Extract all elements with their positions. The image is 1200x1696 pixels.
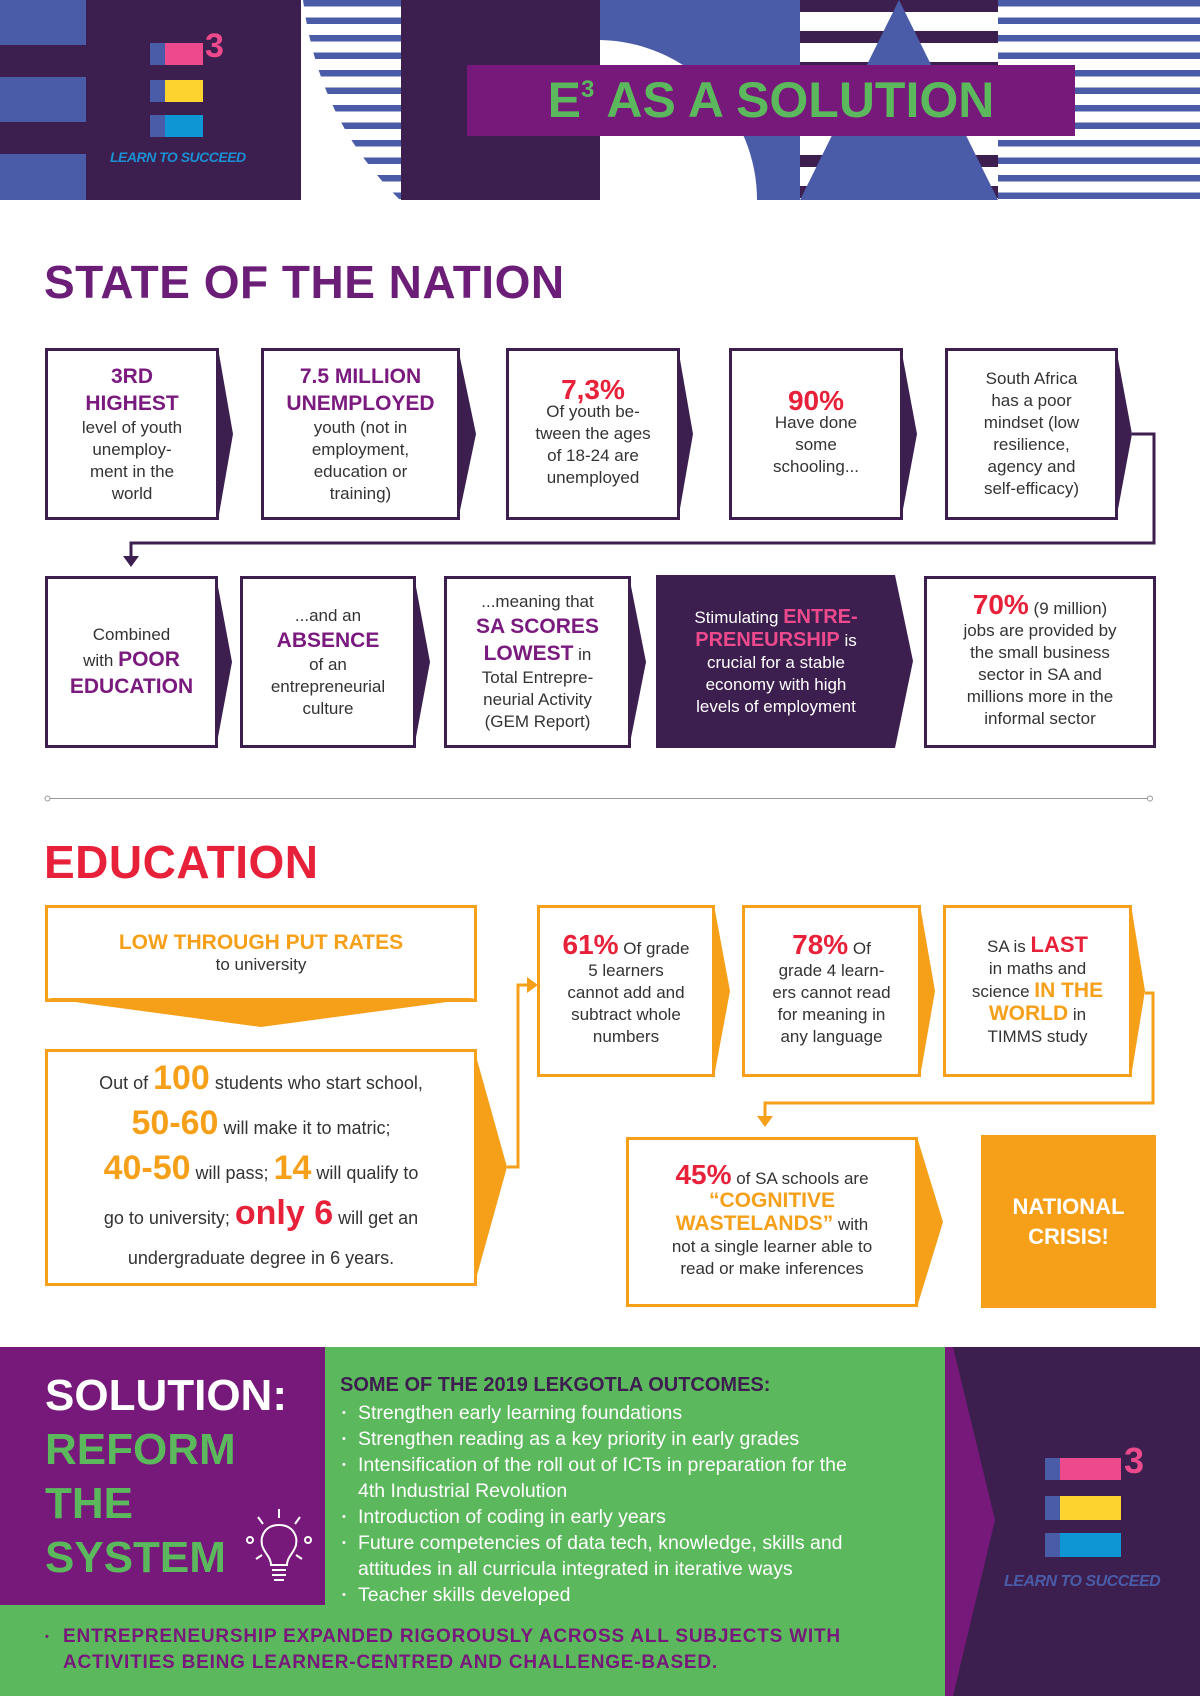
box: 70%: 70% (9 million) bbox=[973, 589, 1107, 620]
heading: education: EDUCATION bbox=[44, 836, 319, 888]
box: poor mindset: self-efficacy) bbox=[984, 479, 1079, 498]
connector arrow: row1 to row2 bbox=[123, 432, 1156, 567]
box: 61%: 5 learners bbox=[588, 961, 664, 980]
text block: lekgotla outcomes: Intensification of the roll out of ICTs in preparation for the bbox=[358, 1454, 847, 1476]
box: 70% bbox=[924, 576, 1156, 748]
box: last in world: TIMMS study bbox=[987, 1027, 1088, 1046]
box: stimulating entrepreneurship: Stimulating ENTRE- bbox=[694, 606, 858, 628]
box: 61% bbox=[537, 905, 730, 1077]
box: 78% bbox=[742, 905, 935, 1077]
box: last in world bbox=[943, 905, 1145, 1077]
panel: solution reform the system bbox=[0, 1347, 325, 1605]
text block: lekgotla outcomes: Strengthen early learning foundations bbox=[358, 1402, 682, 1424]
panel: solution reform the system: REFORM bbox=[45, 1425, 236, 1474]
box: 70%: jobs are provided by bbox=[963, 621, 1117, 640]
panel: solution section background bbox=[0, 1347, 1200, 1696]
box: out of 100: go to university; only 6 will get an bbox=[104, 1194, 418, 1232]
box: 3rd highest: unemploy- bbox=[92, 440, 172, 459]
logo: header: 3 bbox=[205, 27, 224, 65]
box: 7.5 million: 7.5 MILLION bbox=[300, 365, 421, 388]
callout: national crisis: CRISIS! bbox=[1028, 1224, 1109, 1248]
logo: header bbox=[110, 27, 246, 165]
box: out of 100: Out of 100 students who start school, bbox=[99, 1058, 423, 1096]
box: low through put rates: LOW THROUGH PUT RATES bbox=[119, 930, 403, 954]
box: 90% bbox=[729, 348, 917, 520]
box: 7.5 million: employment, bbox=[312, 440, 409, 459]
box: 7.5 million: youth (not in bbox=[314, 418, 407, 437]
text block: lekgotla outcomes: 4th Industrial Revolution bbox=[358, 1480, 567, 1502]
box: 7,3%: unemployed bbox=[547, 468, 639, 487]
box: poor mindset: agency and bbox=[988, 457, 1075, 476]
text block: entrepreneurship expanded: ACTIVITIES BEING LEARNER-CENTRED AND CHALLENGE-BASED. bbox=[63, 1652, 718, 1673]
panel: solution reform the system: SOLUTION: bbox=[45, 1371, 287, 1420]
box: poor education: with POOR bbox=[83, 648, 180, 671]
box: 90%: 90% bbox=[788, 385, 844, 416]
text block: lekgotla outcomes: SOME OF THE 2019 LEKGOTLA OUTCOMES: bbox=[340, 1374, 770, 1396]
box: 3rd highest: world bbox=[112, 484, 152, 503]
box: absence: ABSENCE bbox=[277, 628, 379, 652]
connector arrow: to 45% bbox=[757, 992, 1154, 1127]
box: 7.5 million: education or bbox=[314, 462, 407, 481]
box: 7.5 million: training) bbox=[330, 484, 391, 503]
box: out of 100: 40-50 will pass; 14 will qualify to bbox=[104, 1148, 418, 1186]
box: 90%: schooling... bbox=[773, 457, 859, 476]
box: 90%: some bbox=[795, 435, 837, 454]
box: 45% cognitive wastelands: read or make inferences bbox=[680, 1259, 864, 1278]
panel: solution reform the system: THE bbox=[45, 1479, 133, 1528]
box: stimulating entrepreneurship: economy with high bbox=[706, 674, 846, 694]
box: SA scores lowest bbox=[444, 576, 646, 748]
box: 61%: 61% Of grade bbox=[563, 929, 689, 960]
logo: footer: 3 bbox=[1124, 1440, 1144, 1481]
logo: footer: LEARN TO SUCCEED bbox=[1004, 1573, 1160, 1590]
box: poor education: Combined bbox=[93, 625, 170, 644]
box: 45% cognitive wastelands: 45% of SA schools are bbox=[675, 1159, 869, 1190]
box: poor education bbox=[45, 576, 232, 748]
box: absence: of an bbox=[309, 654, 347, 674]
box: 70%: informal sector bbox=[984, 709, 1096, 728]
box: 61%: subtract whole bbox=[571, 1005, 681, 1024]
panel: solution reform the system: SYSTEM bbox=[45, 1533, 226, 1582]
box: 45% cognitive wastelands: not a single learner able to bbox=[672, 1237, 872, 1256]
box: SA scores lowest: Total Entrepre- bbox=[482, 668, 593, 687]
box: SA scores lowest: (GEM Report) bbox=[485, 712, 590, 731]
box: 45% cognitive wastelands bbox=[626, 1137, 943, 1307]
text block: entrepreneurship expanded: ENTREPRENEURSHIP EXPANDED RIGOROUSLY ACROSS ALL SUBJECTS WITH bbox=[63, 1626, 841, 1647]
box: 45% cognitive wastelands: “COGNITIVE bbox=[709, 1189, 835, 1212]
icon: light bulb bbox=[246, 1509, 312, 1581]
header banner bbox=[0, 0, 1200, 200]
box: stimulating entrepreneurship bbox=[656, 575, 913, 748]
box: absence: ...and an bbox=[295, 606, 361, 624]
box: out of 100: 50-60 will make it to matric; bbox=[132, 1104, 390, 1142]
callout: national crisis: NATIONAL bbox=[1012, 1194, 1125, 1218]
box: 7.5 million: UNEMPLOYED bbox=[286, 392, 435, 415]
box: 70%: the small business bbox=[970, 643, 1110, 662]
divider bbox=[44, 796, 1153, 802]
box: 7,3%: of 18-24 are bbox=[547, 446, 639, 465]
title: E3 AS A SOLUTION bbox=[548, 72, 994, 128]
text block: lekgotla outcomes: Future competencies of data tech, knowledge, skills and bbox=[358, 1532, 843, 1554]
box: 7,3% bbox=[506, 348, 693, 520]
box: last in world: WORLD in bbox=[989, 1002, 1086, 1025]
box: SA scores lowest: LOWEST in bbox=[484, 642, 591, 665]
box: 3rd highest: HIGHEST bbox=[85, 392, 179, 415]
box: stimulating entrepreneurship: levels of employment bbox=[696, 696, 856, 716]
text block: lekgotla outcomes: Strengthen reading as a key priority in early grades bbox=[358, 1428, 799, 1450]
connector arrow: to 61% bbox=[507, 977, 537, 1168]
box: 90%: Have done bbox=[775, 413, 857, 432]
box: poor mindset: South Africa bbox=[986, 369, 1077, 388]
box: absence bbox=[240, 576, 430, 748]
box: 61%: numbers bbox=[593, 1027, 659, 1046]
box: 78%: for meaning in bbox=[778, 1005, 885, 1024]
box: 7,3%: Of youth be- bbox=[546, 402, 640, 421]
box: 78%: ers cannot read bbox=[772, 983, 891, 1002]
box: SA scores lowest: neurial Activity bbox=[483, 690, 592, 709]
box: stimulating entrepreneurship: crucial for a stable bbox=[707, 652, 845, 672]
text block: entrepreneurship expanded: • bbox=[45, 1631, 50, 1643]
box: last in world: SA is LAST bbox=[987, 932, 1088, 957]
box: 78%: any language bbox=[780, 1027, 883, 1046]
text block: lekgotla outcomes: attitudes in all curricula integrated in iterative ways bbox=[358, 1558, 793, 1580]
box: last in world: science IN THE bbox=[972, 979, 1103, 1002]
text block: lekgotla outcomes: Introduction of coding in early years bbox=[358, 1506, 666, 1528]
box: SA scores lowest: ...meaning that bbox=[481, 592, 594, 611]
box: 3rd highest: level of youth bbox=[82, 418, 182, 437]
callout: national crisis bbox=[981, 1135, 1156, 1308]
logo: header: LEARN TO SUCCEED bbox=[110, 149, 246, 165]
box: out of 100: undergraduate degree in 6 years. bbox=[128, 1248, 394, 1268]
box: poor mindset bbox=[945, 348, 1132, 520]
box: 61%: cannot add and bbox=[567, 983, 685, 1002]
box: absence: culture bbox=[302, 698, 354, 718]
box: 7.5 million bbox=[261, 348, 476, 520]
heading: state of the nation: STATE OF THE NATION bbox=[44, 256, 565, 308]
box: 70%: sector in SA and bbox=[978, 665, 1102, 684]
box: 7,3%: 7,3% bbox=[561, 374, 625, 405]
box: 78%: 78% Of bbox=[792, 929, 871, 960]
box: low through put rates: to university bbox=[216, 954, 306, 974]
text block: entrepreneurship expanded bbox=[45, 1626, 841, 1673]
box: stimulating entrepreneurship: PRENEURSHIP is bbox=[695, 628, 857, 650]
box: 3rd highest bbox=[45, 348, 233, 520]
box: low through put rates bbox=[45, 905, 477, 1027]
box: out of 100 bbox=[45, 1049, 507, 1286]
box: 3rd highest: ment in the bbox=[90, 462, 174, 481]
box: poor mindset: has a poor bbox=[991, 391, 1072, 410]
box: poor mindset: resilience, bbox=[993, 435, 1070, 454]
box: absence: entrepreneurial bbox=[271, 676, 385, 696]
box: 70%: millions more in the bbox=[967, 687, 1113, 706]
text block: lekgotla outcomes bbox=[340, 1374, 847, 1606]
box: poor education: EDUCATION bbox=[70, 675, 193, 698]
text block: lekgotla outcomes: Teacher skills developed bbox=[358, 1584, 570, 1606]
box: last in world: in maths and bbox=[989, 959, 1086, 978]
box: 3rd highest: 3RD bbox=[111, 365, 153, 388]
title bbox=[467, 65, 1075, 136]
box: SA scores lowest: SA SCORES bbox=[476, 615, 599, 638]
logo: footer bbox=[1004, 1440, 1160, 1590]
box: poor mindset: mindset (low bbox=[984, 413, 1079, 432]
box: 78%: grade 4 learn- bbox=[779, 961, 884, 980]
box: 7,3%: tween the ages bbox=[535, 424, 651, 443]
box: 45% cognitive wastelands: WASTELANDS” with bbox=[676, 1212, 868, 1235]
